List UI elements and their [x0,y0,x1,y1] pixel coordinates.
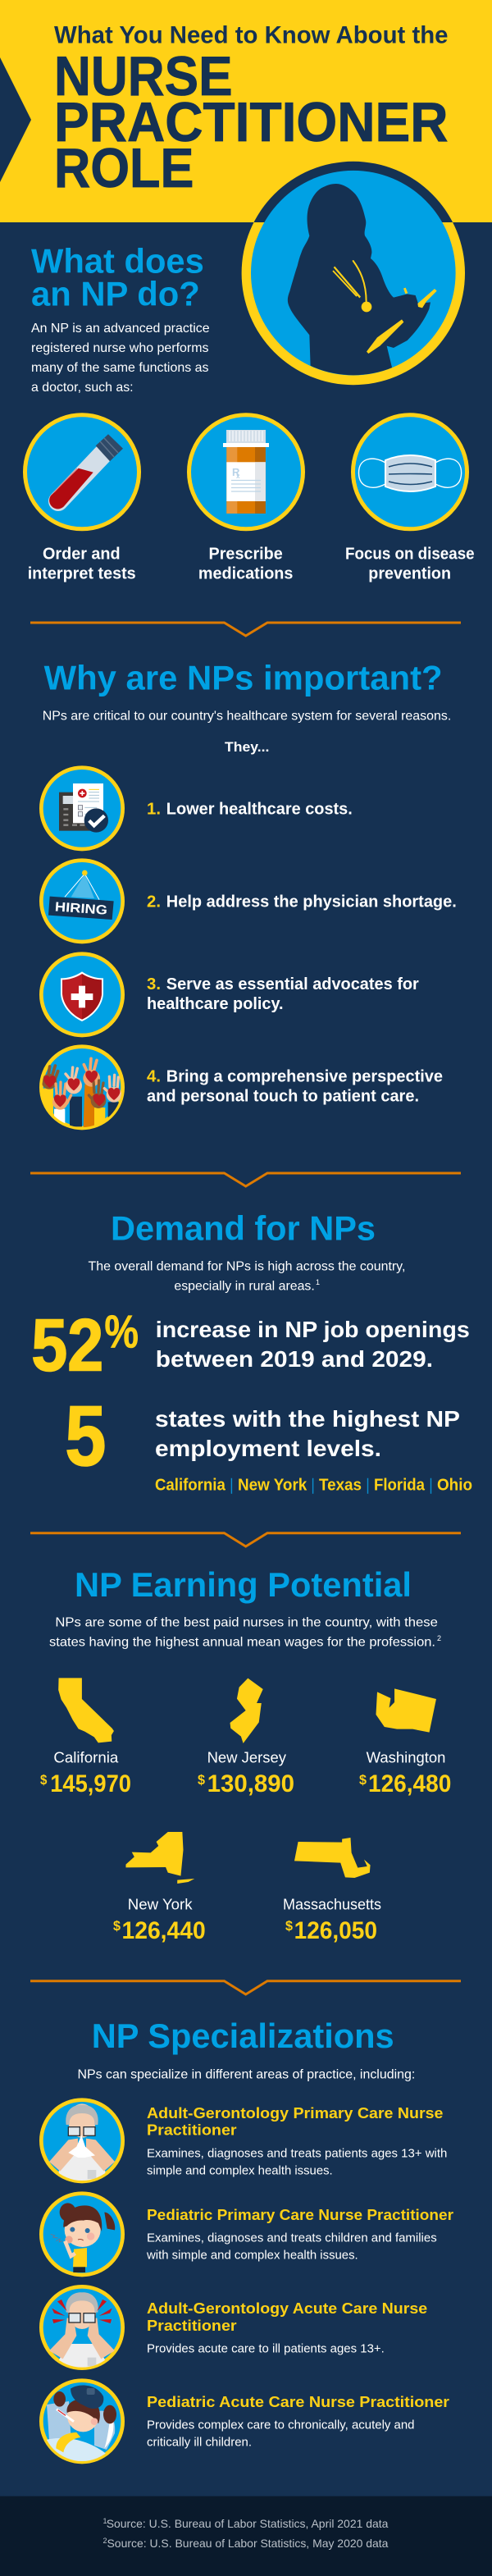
text: pediatric acute care: critically ill children. [147,2435,252,2449]
list: top states [155,1477,472,1495]
icon: hiring sign [41,861,123,942]
text: specializations intro: NPs can specialize in different areas of practice, including: [77,2067,415,2081]
icon: older man with tissue [41,2100,123,2182]
icon: hiring sign: HIRING [54,900,107,918]
footer: sources: Source: U.S. Bureau of Labor Statistics, May 2020 data [107,2537,389,2550]
text: employment levels: states with the highest NP [155,1406,460,1432]
wage: Massachusetts: $ [285,1918,294,1934]
icon: prescription bottle: x [236,473,240,480]
icon: calculator and document [41,768,123,849]
wage: California: California [53,1749,119,1765]
icon: left chevron [0,57,31,182]
header band [0,0,492,222]
map: New York [125,1832,194,1884]
text: advocates: Serve as essential advocates for [166,975,419,993]
title: ROLE [54,137,194,199]
wage: Massachusetts: Massachusetts [283,1896,381,1912]
title: PRACTITIONER [54,91,448,153]
map: Washington [376,1688,436,1733]
text: pediatric primary care: Examines, diagnoses and treats children and families [147,2231,437,2245]
title: NURSE [54,45,233,107]
wage: New York: $ [113,1918,121,1934]
text block: NP definition: registered nurse who performs [31,341,208,355]
text: physician shortage: Help address the physician shortage. [166,893,457,911]
label: prescribe medications: Prescribe [208,546,283,564]
heading: why are NPs important: Why are NPs important? [44,659,443,697]
wage: New York: 126,440 [121,1917,206,1944]
title [54,21,448,199]
text: why NPs intro: NPs are critical to our country's healthcare system for several reasons. [43,709,451,723]
map: Massachusetts [294,1838,371,1878]
heading: NP earning potential: NP Earning Potential [75,1565,412,1604]
text: comprehensive perspective [147,1068,443,1106]
text: advocates: 3. [147,975,161,993]
text: they: They... [225,739,269,755]
wage: Washington: $ [359,1772,367,1788]
text block: NP definition: many of the same functions as [31,361,208,375]
wage: Massachusetts: 126,050 [294,1917,377,1944]
text: lower healthcare costs: Lower healthcare costs. [166,800,353,818]
stat: 52 percent: % [104,1306,139,1359]
wage: California: $ [40,1772,48,1788]
text: comprehensive perspective: Bring a comprehensive perspective [166,1068,443,1086]
list: top states: Florida [374,1477,426,1495]
text block: NP definition [31,322,210,395]
text: pediatric primary care [146,2207,453,2262]
label: prescribe medications [198,546,293,583]
label: focus on disease prevention: prevention [368,565,451,583]
heading: NP specializations: NP Specializations [92,2016,394,2055]
label: prescribe medications: medications [198,565,293,583]
icon: stethoscope [332,261,371,312]
wage: Washington: Washington [367,1749,445,1765]
footer: sources: Source: U.S. Bureau of Labor Statistics, April 2021 data [107,2517,389,2530]
text: adult-gerontology acute care: Provides acute care to ill patients ages 13+. [147,2341,385,2355]
text: pediatric acute care [147,2394,449,2449]
stat: 5 states: 5 [65,1389,106,1484]
list: top states: Ohio [437,1477,472,1495]
icon: prescription bottle: R [232,466,240,478]
text: job openings: between 2019 and 2029. [156,1346,433,1372]
wage: New York: New York [128,1896,194,1912]
text: demand intro: 1 [316,1278,320,1286]
icon: nurse silhouette in circle [242,162,465,385]
list: top states: New York [238,1477,308,1495]
text: physician shortage: 2. [147,893,161,911]
text: pediatric primary care: Pediatric Primary Care Nurse Practitioner [147,2207,453,2223]
text: demand intro [89,1259,405,1293]
wage: Massachusetts [283,1896,381,1944]
icon: test tube [25,415,139,529]
text: job openings [156,1317,470,1372]
text: adult-gerontology acute care: Adult-Gerontology Acute Care Nurse [147,2300,427,2317]
wage: New York [113,1896,206,1944]
text: lower healthcare costs: 1. [147,800,161,818]
text: adult-gerontology primary care: simple and complex health issues. [147,2163,333,2177]
text: advocates [147,975,419,1013]
wage: Washington [359,1749,451,1797]
wage: New Jersey: $ [198,1772,206,1788]
text: earning intro: NPs are some of the best paid nurses in the country, with these [55,1615,438,1629]
icon: raised hands with hearts [41,1047,123,1128]
text: adult-gerontology primary care: Adult-Gerontology Primary Care Nurse [147,2105,443,2122]
heading: what does an NP do: an NP do? [31,274,200,313]
text: employment levels [155,1406,460,1461]
text: employment levels: employment levels. [155,1436,381,1461]
text: adult-gerontology acute care [147,2300,427,2355]
text: adult-gerontology primary care [147,2105,447,2177]
icon: prescription bottle [189,415,303,529]
text: pediatric primary care: with simple and complex health issues. [146,2248,358,2262]
wage: California: 145,970 [50,1770,131,1797]
map: California [58,1678,114,1742]
heading: what does an NP do: What does [31,241,204,280]
wage: Washington: 126,480 [368,1770,451,1797]
stat: 52 percent: 52 [31,1305,103,1387]
wage: New Jersey: 130,890 [207,1770,294,1797]
text: earning intro [49,1615,441,1650]
map: New Jersey [230,1679,263,1743]
text: earning intro: 2 [437,1634,441,1642]
icon: older man with headache [41,2286,123,2370]
heading: what does an NP do [31,241,204,313]
text: demand intro: The overall demand for NPs is high across the country, [89,1259,405,1273]
text: job openings: increase in NP job openings [156,1317,470,1342]
list: top states: Texas [319,1477,362,1495]
icon: sick girl in bed [39,2381,123,2464]
wage: New Jersey: New Jersey [207,1749,286,1765]
footer: sources: 2 [103,2537,107,2545]
text: comprehensive perspective: 4. [147,1068,161,1086]
label: focus on disease prevention: Focus on disease [345,546,475,564]
label: order and interpret tests: Order and [43,546,121,564]
list: top states: California [155,1477,226,1495]
label: order and interpret tests: interpret tests [28,565,136,583]
text: earning intro: states having the highest annual mean wages for the profession. [49,1636,435,1650]
text: demand intro: especially in rural areas. [174,1279,315,1293]
icon: girl with toothache [41,2194,123,2275]
icon: face mask [353,415,467,529]
label: focus on disease prevention [345,546,475,583]
text block: NP definition: An NP is an advanced practice [31,322,210,336]
text: pediatric acute care: Pediatric Acute Care Nurse Practitioner [147,2394,449,2410]
footer: sources: 1 [103,2517,107,2525]
text: adult-gerontology acute care: Practitioner [147,2318,237,2334]
text: adult-gerontology primary care: Examines, diagnoses and treats patients ages 13+ with [147,2146,447,2160]
wage: California [40,1749,131,1797]
wage: New Jersey [198,1749,294,1797]
icon: shield with cross [41,954,123,1035]
text: adult-gerontology primary care: Practitioner [147,2122,237,2139]
text: pediatric acute care: Provides complex care to chronically, acutely and [147,2418,415,2432]
text: comprehensive perspective: and personal touch to patient care. [147,1088,419,1106]
text block: NP definition: a doctor, such as: [31,381,134,395]
label: order and interpret tests [28,546,136,583]
title: What You Need to Know About the [54,21,448,48]
footer: sources [0,2496,492,2576]
heading: demand for NPs: Demand for NPs [111,1209,376,1248]
icon: pen and clipboard [367,288,437,354]
text: advocates: healthcare policy. [147,995,284,1013]
